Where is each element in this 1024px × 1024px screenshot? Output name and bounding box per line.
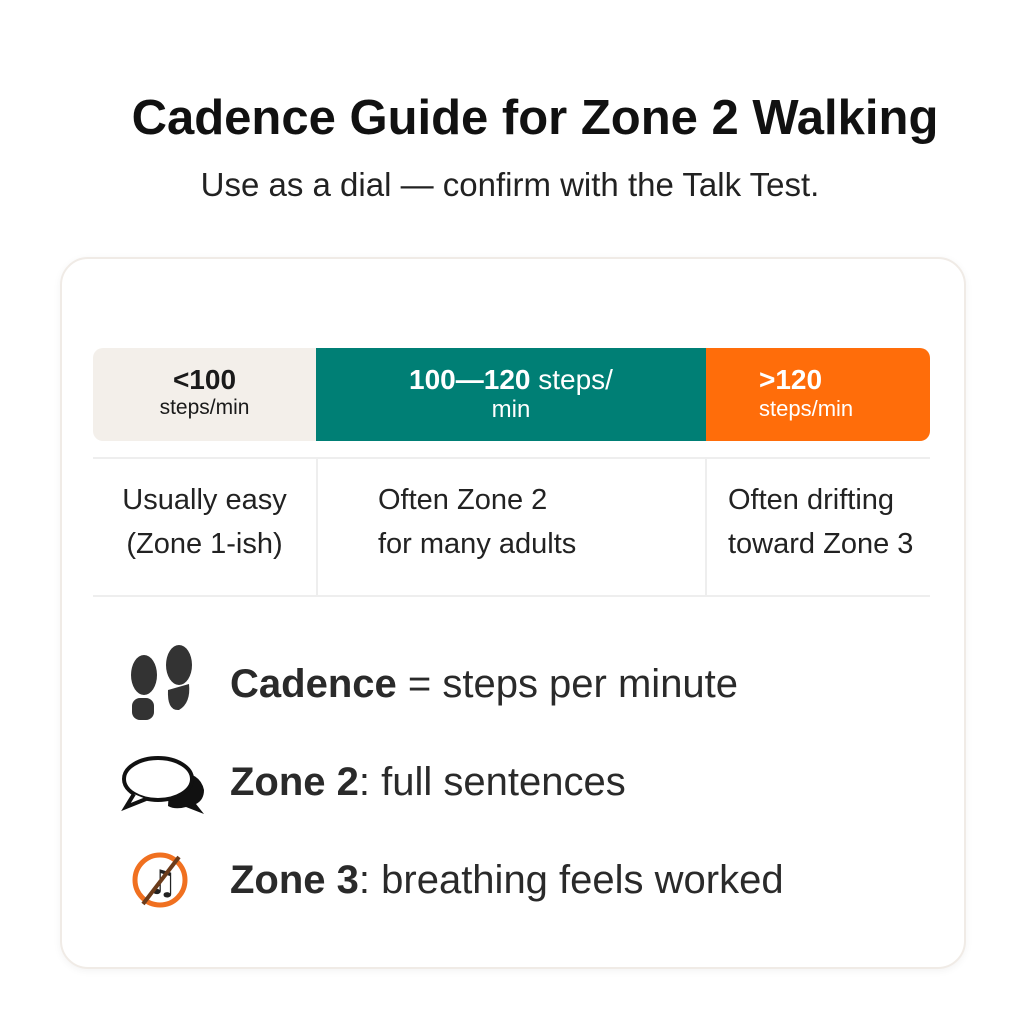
icon: footprints: [131, 645, 192, 720]
segment low: steps/min: [160, 396, 249, 419]
text: high: toward Zone 3: [728, 528, 913, 560]
segment high: [706, 348, 930, 441]
text: high: Often drifting: [728, 484, 894, 516]
icon: speech bubbles: [121, 756, 204, 814]
text: cadence: Cadence = steps per minute: [230, 662, 738, 706]
segment mid: min: [492, 396, 530, 423]
text: low: Usually easy: [122, 484, 287, 516]
panel: card: [60, 257, 966, 969]
icon: no music: ♫: [147, 863, 177, 903]
text: high: [728, 484, 913, 560]
text: mid: for many adults: [378, 528, 576, 560]
text: zone 2: Zone 2: full sentences: [230, 760, 626, 804]
segment high: >120: [759, 364, 822, 395]
text: low: (Zone 1-ish): [126, 528, 283, 560]
icon: no music: [132, 852, 188, 908]
bar: cadence ranges: [93, 348, 930, 441]
segment low: <100: [173, 364, 236, 395]
text: mid: Often Zone 2: [378, 484, 547, 516]
text: zone 3: Zone 3: breathing feels worked: [230, 858, 784, 902]
text: low: [122, 484, 287, 560]
text: mid: [378, 484, 576, 560]
segment high: steps/min: [759, 396, 853, 421]
segment mid: 100—120 steps/: [409, 364, 613, 395]
segment low: [93, 348, 316, 441]
segment mid: [316, 348, 706, 441]
title: Cadence Guide for Zone 2 Walking: [132, 91, 938, 145]
subtitle: Use as a dial — confirm with the Talk Test.: [201, 166, 819, 203]
